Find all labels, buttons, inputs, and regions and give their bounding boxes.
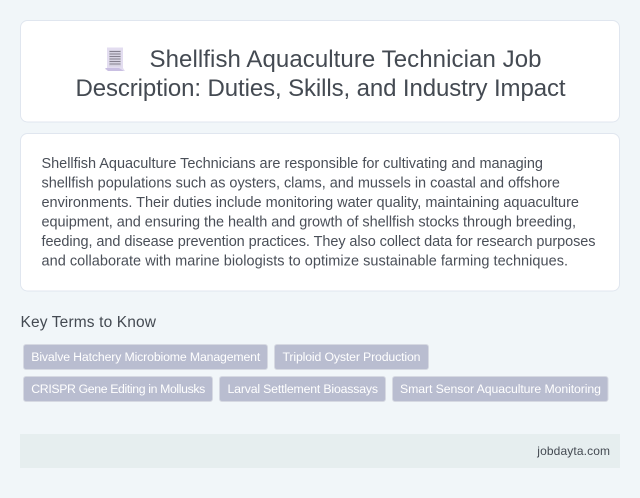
chip: triploid oyster: Triploid Oyster Production [282,350,421,364]
chip: crispr [24,376,212,402]
footer bar [20,434,620,468]
description text: and collaborate with marine biologists to optimize sustainable farming techniques. [42,254,568,270]
chip: crispr: CRISPR Gene Editing in Mollusks [31,382,205,396]
description text: feeding, and disease prevention practices. They also collect data for research purposes [42,234,596,250]
description text [42,156,596,270]
chip: larval settlement [220,376,386,402]
title [76,46,566,102]
description text: environments. Their duties include monitoring water quality, maintaining aquaculture [42,195,579,211]
chip: triploid oyster [274,344,428,370]
chip: smart sensor: Smart Sensor Aquaculture Monitoring [400,382,601,396]
footer bar: jobdayta.com [536,444,610,458]
description text: Shellfish Aquaculture Technicians are responsible for cultivating and managing [42,156,543,172]
description text: equipment, and ensuring the health and growth of shellfish stocks through breeding, [42,214,576,230]
heading: key terms: Key Terms to Know [20,314,157,331]
chip: smart sensor [392,376,608,402]
panel: description [20,134,620,291]
title: Shellfish Aquaculture Technician Job [150,46,542,73]
chip: bivalve hatchery [24,344,268,370]
icon: paper scroll [105,48,125,71]
description text: shellfish populations such as oysters, clams, and mussels in coastal and offshore [42,176,560,192]
chip: larval settlement: Larval Settlement Bioassays [228,382,378,396]
panel: title card [20,20,620,122]
title: Description: Duties, Skills, and Industry Impact [76,75,566,102]
key terms chips [24,344,608,402]
chip: bivalve hatchery: Bivalve Hatchery Microbiome Management [31,350,261,364]
